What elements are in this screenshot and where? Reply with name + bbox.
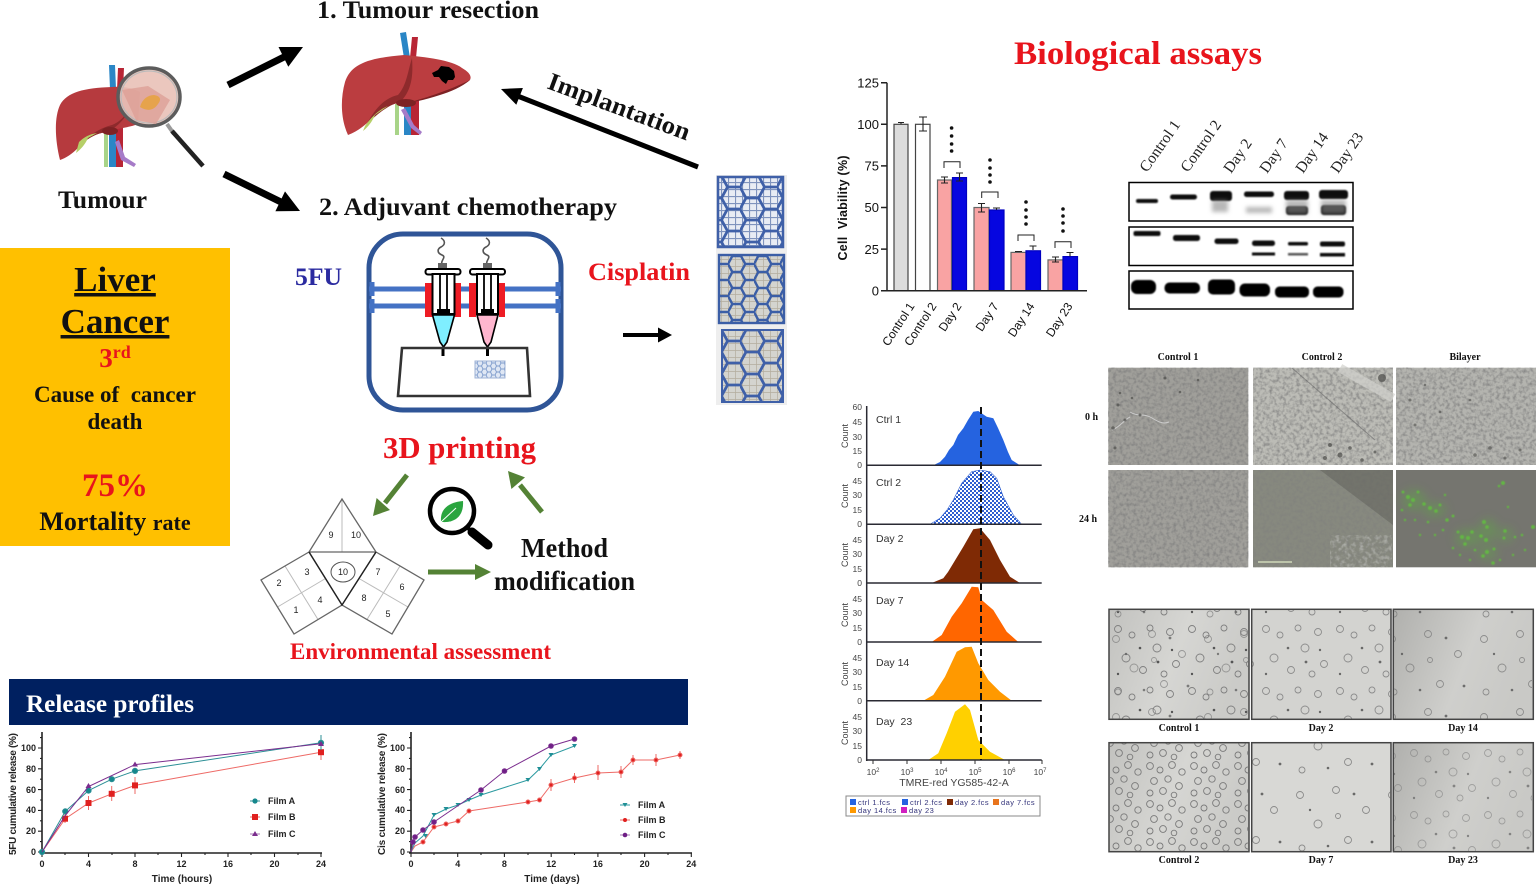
log axis labels: 10: [969, 767, 978, 777]
arrow: printing to assessment: [373, 475, 407, 516]
micrograph: control 1, 24 h: [1108, 470, 1248, 567]
legend: films: Film C: [638, 830, 666, 840]
micrograph labels: Day 2: [1309, 723, 1333, 734]
legend: films: Film C: [268, 829, 296, 839]
histogram: Day 23: Count: [840, 720, 850, 745]
legend: films: [250, 796, 296, 839]
chart: 5FU release: 40: [26, 805, 36, 815]
chart: cisplatin release: 100: [390, 743, 405, 753]
bar labels: Day 7: [973, 300, 1002, 334]
chart: cell viability bars: 50: [865, 200, 879, 215]
text: method modification: Method: [521, 533, 608, 563]
text: method modification: [494, 533, 635, 596]
histogram: Day 7: 0: [857, 637, 862, 647]
icon: resected liver: [342, 32, 471, 135]
histogram: Ctrl 1: Ctrl 1: [876, 414, 901, 426]
histogram: Day 2: 0: [857, 578, 862, 588]
bar labels: Control 2: [901, 300, 940, 348]
series: film A: [411, 744, 577, 852]
legend: films: Film B: [268, 812, 296, 822]
bar labels: [879, 300, 1076, 348]
histogram: Day 14: 0: [857, 696, 862, 706]
log axis labels: 5: [978, 768, 982, 774]
column labels: Control 2: [1302, 352, 1342, 363]
heading: 3D printing: 3D printing: [383, 430, 536, 465]
heading: Biological assays: Biological assays: [1014, 36, 1262, 72]
lane labels: Day 14: [1292, 129, 1332, 176]
panel: printed scaffolds: [716, 175, 787, 405]
histogram: Day 23: 15: [853, 741, 862, 751]
micrograph: day 14: [1393, 609, 1533, 719]
diagram: environmental assessment pentagon: 7: [375, 567, 381, 577]
histogram: Day 23: [840, 704, 1005, 765]
panel: release profiles header: [9, 679, 688, 725]
chart: cell viability bars: 100: [857, 117, 879, 132]
histogram: Day 7: Count: [840, 602, 850, 627]
diagram: environmental assessment pentagon: 10: [351, 530, 361, 540]
syringe: 5FU: [425, 238, 461, 356]
arrow: method modification to printing: [508, 471, 542, 512]
micrograph labels: Day 7: [1309, 855, 1333, 866]
micrograph labels: Control 2: [1159, 855, 1199, 866]
chart: 5FU release: [8, 732, 326, 885]
arrow: assessment to method: [428, 564, 491, 580]
chart: cisplatin release: 0: [400, 847, 405, 857]
diagram: environmental assessment pentagon: 5: [385, 609, 391, 619]
log axis labels: 6: [1012, 768, 1016, 774]
column labels: Control 1: [1158, 352, 1198, 363]
log axis labels: 7: [1043, 768, 1047, 774]
micrograph: day 7: [1252, 743, 1391, 852]
histogram: Ctrl 1: [840, 402, 1020, 470]
histogram: Day 14: 30: [853, 667, 862, 677]
chart: 5FU release: 12: [176, 859, 187, 869]
text: cause of cancer death: Cause of cancer: [34, 382, 196, 407]
histogram: Ctrl 1: 0: [857, 460, 862, 470]
legend: films: Film A: [638, 800, 666, 810]
histogram: Ctrl 1: 60: [853, 402, 862, 412]
panel: liver cancer facts: [0, 248, 230, 546]
chart: 5FU release: 5FU cumulative release (%): [8, 733, 19, 855]
label: Implantation: Implantation: [544, 68, 694, 146]
diagram: environmental assessment pentagon: 8: [361, 593, 367, 603]
histogram: Day 7: 30: [853, 608, 862, 618]
chart: 5FU release: 8: [132, 859, 138, 869]
micrograph: control 2, 24 h: [1253, 470, 1393, 567]
diagram: environmental assessment pentagon: 9: [328, 530, 334, 540]
histogram: Day 2: Day 2: [876, 533, 904, 545]
series: film C: [411, 737, 577, 852]
legend: films: [620, 800, 666, 840]
legend: samples: ctrl 2.fcs: [910, 798, 942, 807]
micrograph: control 2, 0 h: [1253, 368, 1393, 465]
chart: 5FU release: 16: [223, 859, 233, 869]
axes: [867, 406, 1042, 761]
micrograph: control 1, 0 h: [1108, 368, 1248, 465]
log axis labels: 10: [1003, 767, 1012, 777]
lane labels: Day 2: [1220, 136, 1256, 176]
histogram: Ctrl 2: Count: [840, 484, 850, 508]
histogram: Ctrl 1: 15: [853, 446, 862, 456]
lane labels: Control 2: [1177, 117, 1225, 175]
chart: cisplatin release: 80: [395, 764, 405, 774]
histogram: Ctrl 1: 30: [853, 432, 862, 442]
label: 5FU: 5FU: [295, 264, 342, 291]
chart: cisplatin release: 24: [686, 859, 696, 869]
label: Cisplatin: Cisplatin: [588, 259, 690, 286]
chart: 5FU release: 20: [269, 859, 280, 869]
histogram: Day 14: [840, 647, 1012, 706]
series: film A: [39, 735, 324, 855]
chart: cisplatin release: 8: [502, 859, 507, 869]
icon: magnifier lens: [118, 68, 203, 166]
significance brackets: [944, 126, 1071, 248]
histogram: Ctrl 2: 0: [857, 519, 862, 529]
log axis labels: 10: [1034, 767, 1043, 777]
bar labels: Control 1: [879, 300, 918, 348]
chart: cisplatin release: [377, 732, 696, 885]
scaffold: middle: [719, 255, 784, 323]
chart: cell viability bars: 0: [872, 284, 879, 298]
diagram: environmental assessment pentagon: 4: [317, 595, 323, 605]
histogram: Day 14: 15: [853, 682, 862, 692]
bars: [894, 124, 1078, 291]
legend: films: Film B: [638, 815, 666, 825]
stat: 3rd: 3: [99, 343, 113, 373]
legend: samples: [846, 796, 1040, 816]
series: film B: [411, 751, 682, 852]
column labels: [1158, 352, 1481, 363]
chart: cisplatin release: Cis cumulative release (%): [377, 733, 388, 855]
chart: 5FU release: 24: [316, 859, 326, 869]
label: Environmental assessment: Environmental assessment: [290, 639, 551, 664]
chart: cell viability bars: 125: [857, 76, 879, 90]
blot: bottom: [1129, 271, 1353, 309]
panel: western blot: [1129, 117, 1367, 309]
text: method modification: modification: [494, 566, 635, 596]
series: film C: [42, 741, 324, 852]
blot: middle: [1129, 227, 1353, 266]
legend: samples: day 23: [909, 806, 934, 815]
chart: flow cytometry histograms: [840, 402, 1047, 816]
chart: cisplatin release: 12: [546, 859, 556, 869]
log axis labels: [867, 767, 1047, 777]
stat: 3rd: rd: [113, 342, 131, 362]
legend: samples: day 7.fcs: [1001, 798, 1035, 807]
log axis labels: 4: [944, 768, 948, 774]
chart: 5FU release: Time (hours): [152, 874, 212, 885]
histogram: Day 23: 30: [853, 726, 862, 736]
chart: cell viability bars: [836, 76, 1087, 348]
row labels: 0 h: [1085, 412, 1098, 423]
legend: samples: day 2.fcs: [955, 798, 989, 807]
title: Liver Cancer: [61, 260, 169, 341]
chart: cisplatin release: 60: [395, 785, 405, 795]
log axis labels: 2: [876, 768, 880, 774]
scaffold: bottom: [722, 330, 783, 402]
histogram: Day 7: [840, 587, 1018, 647]
histogram: Day 2: [840, 528, 1020, 588]
panel: wound healing micrographs: [1079, 352, 1536, 567]
diagram: environmental assessment pentagon: 3: [304, 567, 310, 577]
text: mortality rate: Mortality rate: [39, 507, 191, 536]
lane labels: [1136, 117, 1367, 176]
chart: cisplatin release: Time (days): [524, 874, 580, 885]
error bars: [898, 117, 1074, 262]
chart: 5FU release: 100: [21, 743, 36, 753]
histogram: Day 2: Count: [840, 542, 850, 567]
histogram: Day 14: Day 14: [876, 657, 909, 669]
legend: films: Film A: [268, 796, 296, 806]
micrograph: control 1: [1109, 609, 1249, 719]
log axis labels: 10: [935, 767, 944, 777]
histogram: Day 7: Day 7: [876, 595, 904, 607]
chart: cisplatin release: 20: [395, 826, 405, 836]
chart: 5FU release: 4: [86, 859, 91, 869]
histogram: Ctrl 2: Ctrl 2: [876, 477, 901, 489]
icon: liver with magnifier: [56, 65, 203, 167]
row labels: 24 h: [1079, 514, 1098, 525]
heading: Adjuvant chemotherapy: 2. Adjuvant chemotherapy: [319, 194, 618, 221]
syringe: cisplatin: [469, 238, 505, 356]
chart: cell viability bars: Cell Viability (%): [836, 156, 850, 260]
chart: cisplatin release: 40: [395, 805, 405, 815]
micrograph labels: Day 23: [1448, 855, 1478, 866]
histogram: Ctrl 2: 15: [853, 505, 862, 515]
micrograph: control 2: [1109, 743, 1249, 852]
stat: 75%: 75%: [82, 468, 148, 504]
diagram: environmental assessment pentagon: 10: [338, 567, 348, 577]
diagram: environmental assessment pentagon: 2: [276, 578, 282, 588]
label: Tumour: Tumour: [58, 187, 147, 214]
diagram: environmental assessment pentagon: 6: [399, 582, 405, 592]
histogram: Day 2: 30: [853, 549, 862, 559]
icon: magnifier with leaf: [430, 489, 488, 545]
log axis labels: 3: [910, 768, 914, 774]
histogram: Day 23: 45: [853, 712, 862, 722]
arrow: to tumour resection: [228, 47, 303, 85]
histogram: Day 2: 15: [853, 564, 862, 574]
column labels: Bilayer: [1449, 352, 1481, 363]
micrograph: day 2: [1252, 609, 1391, 719]
chart: 5FU release: 60: [26, 785, 36, 795]
legend: samples: day 14.fcs: [858, 806, 897, 815]
arrow: implantation: [501, 88, 698, 167]
histogram: Ctrl 1: Count: [840, 424, 850, 448]
histogram: Day 23: 0: [857, 755, 862, 765]
diagram: environmental assessment pentagon: 1: [293, 605, 299, 615]
lane labels: Day 23: [1327, 129, 1367, 176]
arrow: printer to scaffold: [623, 328, 672, 342]
reference line: [980, 407, 982, 760]
bar labels: Day 2: [936, 300, 965, 334]
bar labels: Day 23: [1043, 300, 1076, 340]
histogram: Ctrl 2: [840, 470, 1022, 529]
heading: release profiles: Release profiles: [26, 691, 194, 718]
tumour mark: [432, 66, 455, 84]
histogram: Day 14: 45: [853, 653, 862, 663]
chart: 5FU release: 0: [31, 847, 36, 857]
arrow: to adjuvant chemotherapy: [224, 174, 300, 211]
histogram: Day 7: 45: [853, 594, 862, 604]
chart: cisplatin release: 20: [640, 859, 650, 869]
series: film B: [42, 745, 324, 852]
micrograph: bilayer, 0 h: [1396, 368, 1536, 465]
histogram: Day 2: 45: [853, 535, 862, 545]
histogram: Ctrl 1: 45: [853, 417, 862, 427]
micrograph: bilayer, 24 h with green cells: [1396, 470, 1536, 567]
histogram: Ctrl 2: 45: [853, 476, 862, 486]
micrograph labels: [1159, 723, 1478, 866]
panel: cell morphology micrographs: [1109, 609, 1533, 866]
row labels: [1079, 412, 1098, 525]
histogram: Day 23: Day 23: [876, 716, 912, 728]
chart: flow cytometry histograms: TMRE-red YG585-42-A: [899, 777, 1009, 789]
chart: cisplatin release: 0: [408, 859, 414, 869]
chart: cisplatin release: 4: [455, 859, 460, 869]
title: Liver Cancer: Liver: [74, 260, 156, 299]
log axis labels: 10: [901, 767, 910, 777]
micrograph labels: Control 1: [1159, 723, 1199, 734]
title: Liver Cancer: Cancer: [61, 302, 169, 341]
chart: cell viability bars: 25: [865, 242, 879, 257]
diagram: environmental assessment pentagon: [261, 499, 424, 634]
bar labels: Day 14: [1005, 300, 1038, 340]
text: cause of cancer death: death: [88, 409, 143, 434]
histogram: Ctrl 2: 30: [853, 490, 862, 500]
lane labels: Day 7: [1256, 136, 1292, 176]
chart: 5FU release: 0: [39, 859, 45, 869]
log axis labels: 10: [867, 767, 876, 777]
legend: samples: ctrl 1.fcs: [858, 798, 890, 807]
lane labels: Control 1: [1136, 117, 1184, 175]
scaffold: top: [718, 177, 783, 247]
histogram: Day 7: 15: [853, 623, 862, 633]
blot: top: [1129, 182, 1353, 221]
chart: 5FU release: 80: [26, 764, 36, 774]
micrograph labels: Day 14: [1448, 723, 1478, 734]
text: cause of cancer death: [34, 382, 196, 434]
axes: [881, 83, 1087, 291]
chart: cell viability bars: 75: [865, 158, 879, 174]
chart: 5FU release: 20: [26, 826, 36, 836]
histogram: Day 14: Count: [840, 662, 850, 686]
chart: cisplatin release: 16: [593, 859, 603, 869]
micrograph: day 23: [1393, 743, 1533, 852]
icon: 3D printer: [369, 234, 561, 410]
